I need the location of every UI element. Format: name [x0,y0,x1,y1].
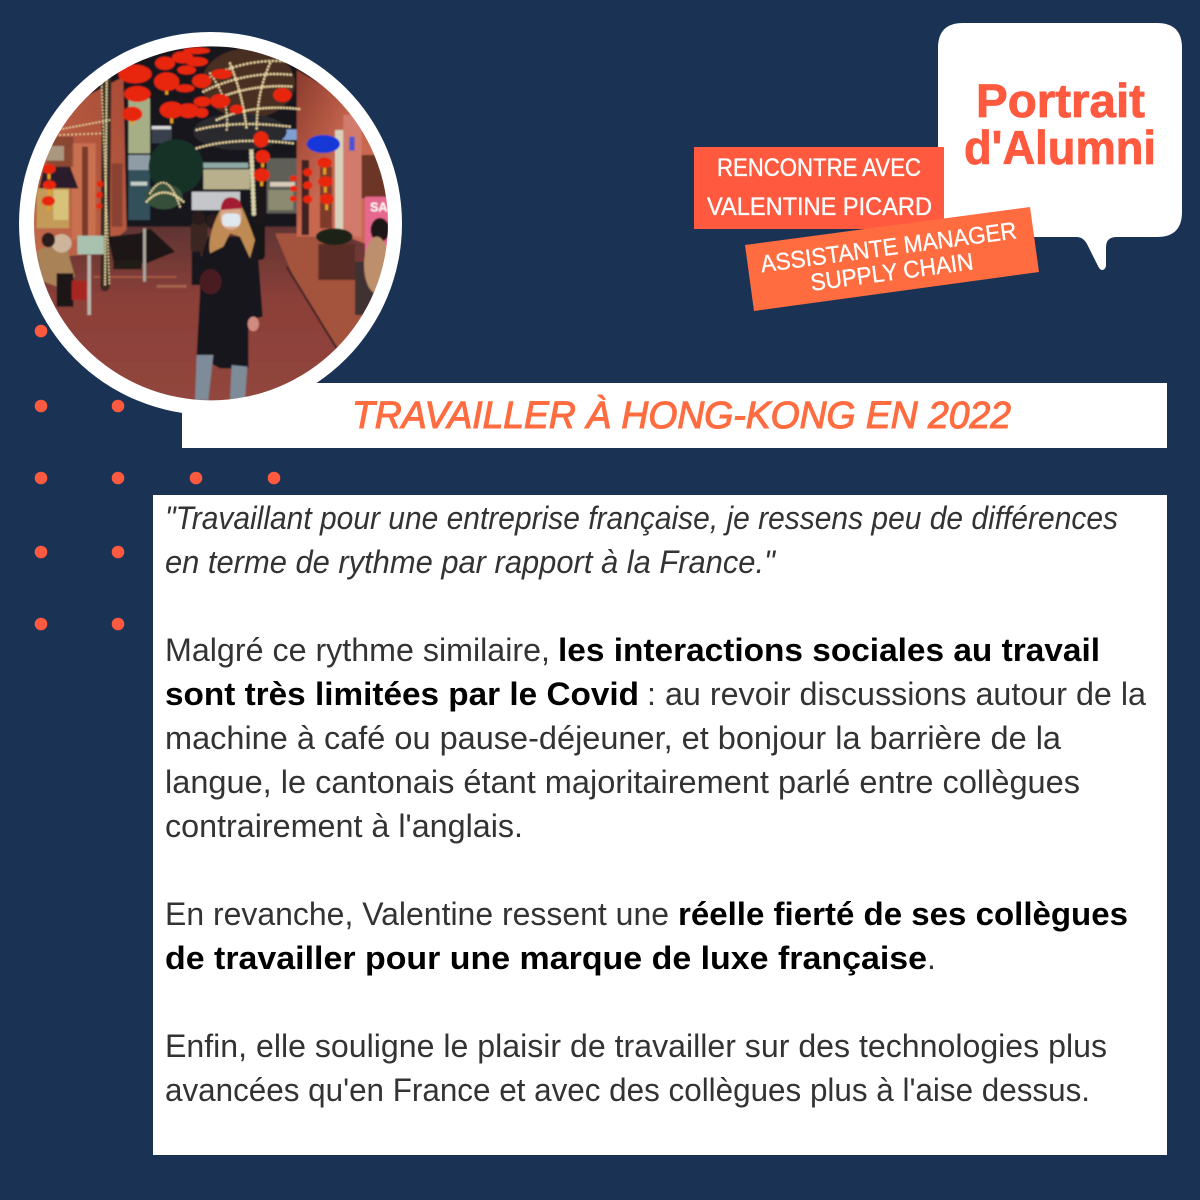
paragraph: social interactions: : au revoir discussions autour de la [647,676,1146,712]
centre background [152,127,172,143]
paragraph: technologies: avancées qu'en France et avec des collègues plus à l'aise dessus. [165,1072,1090,1108]
paragraph: pride: En revanche, Valentine ressent une [165,896,669,932]
speech bubble: Portrait d'Alumni [938,23,1182,270]
paragraph: social interactions: contrairement à l'anglais. [165,808,523,844]
lantern tassels [48,91,327,211]
canopy lights [147,48,302,207]
woman [197,237,263,368]
text panel [153,495,1167,1155]
title banner [182,383,1167,448]
photo: street with lanterns: SA [370,201,388,215]
bubble title: d'Alumni [964,121,1156,174]
right building [295,69,374,244]
billboard and back towers [128,98,150,153]
photo: street with lanterns [30,43,393,403]
paragraph: social interactions: machine à café ou pause-déjeuner, et bonjour la barrière de la [165,720,1061,756]
paragraph: technologies: Enfin, elle souligne le plaisir de travailler sur des technologies plus [165,1028,1107,1064]
paragraph: social interactions [165,632,1146,844]
dotted pattern [35,325,280,630]
bubble title [964,74,1156,174]
planter [318,244,355,280]
paragraph: social interactions: langue, le cantonais étant majoritairement parlé entre collègues [165,764,1080,800]
paragraph: pride: . [927,940,936,976]
background pedestrians [191,222,207,253]
name tag text: VALENTINE PICARD [707,193,932,221]
name tag text [707,154,932,221]
paragraph: technologies [165,1028,1107,1108]
pink sale poster [365,197,390,253]
title text: TRAVAILLER À HONG-KONG EN 2022 [352,394,1011,437]
bubble title: Portrait [976,74,1145,127]
left building [30,77,127,260]
name tag text: RENCONTRE AVEC [717,154,921,182]
paragraph: pride: réelle fierté de ses collègues [678,896,1128,932]
portrait photo in white ring [19,32,402,415]
lit tree trunks [57,80,261,287]
job title text: ASSISTANTE MANAGER [759,217,1018,278]
paragraph: pride [165,896,1128,976]
paragraph: pride: de travailler pour une marque de luxe française [165,940,927,976]
ground [30,227,390,403]
job title text [759,217,1022,303]
quote: "Travaillant pour une entreprise française, je ressens peu de différences [165,500,1118,536]
job title text: SUPPLY CHAIN [809,248,975,297]
quote [165,500,1118,580]
paragraph: social interactions: sont très limitées par le Covid [165,676,639,712]
paragraph: social interactions: Malgré ce rythme similaire, [165,632,550,668]
job title tag [745,207,1039,311]
name tag [694,147,944,229]
lanterns [42,47,334,209]
paragraph: social interactions: les interactions sociales au travail [558,632,1100,668]
green trees [149,139,203,194]
blue sign [307,135,340,153]
quote: en terme de rythme par rapport à la France." [165,544,777,580]
seated people [37,242,75,287]
